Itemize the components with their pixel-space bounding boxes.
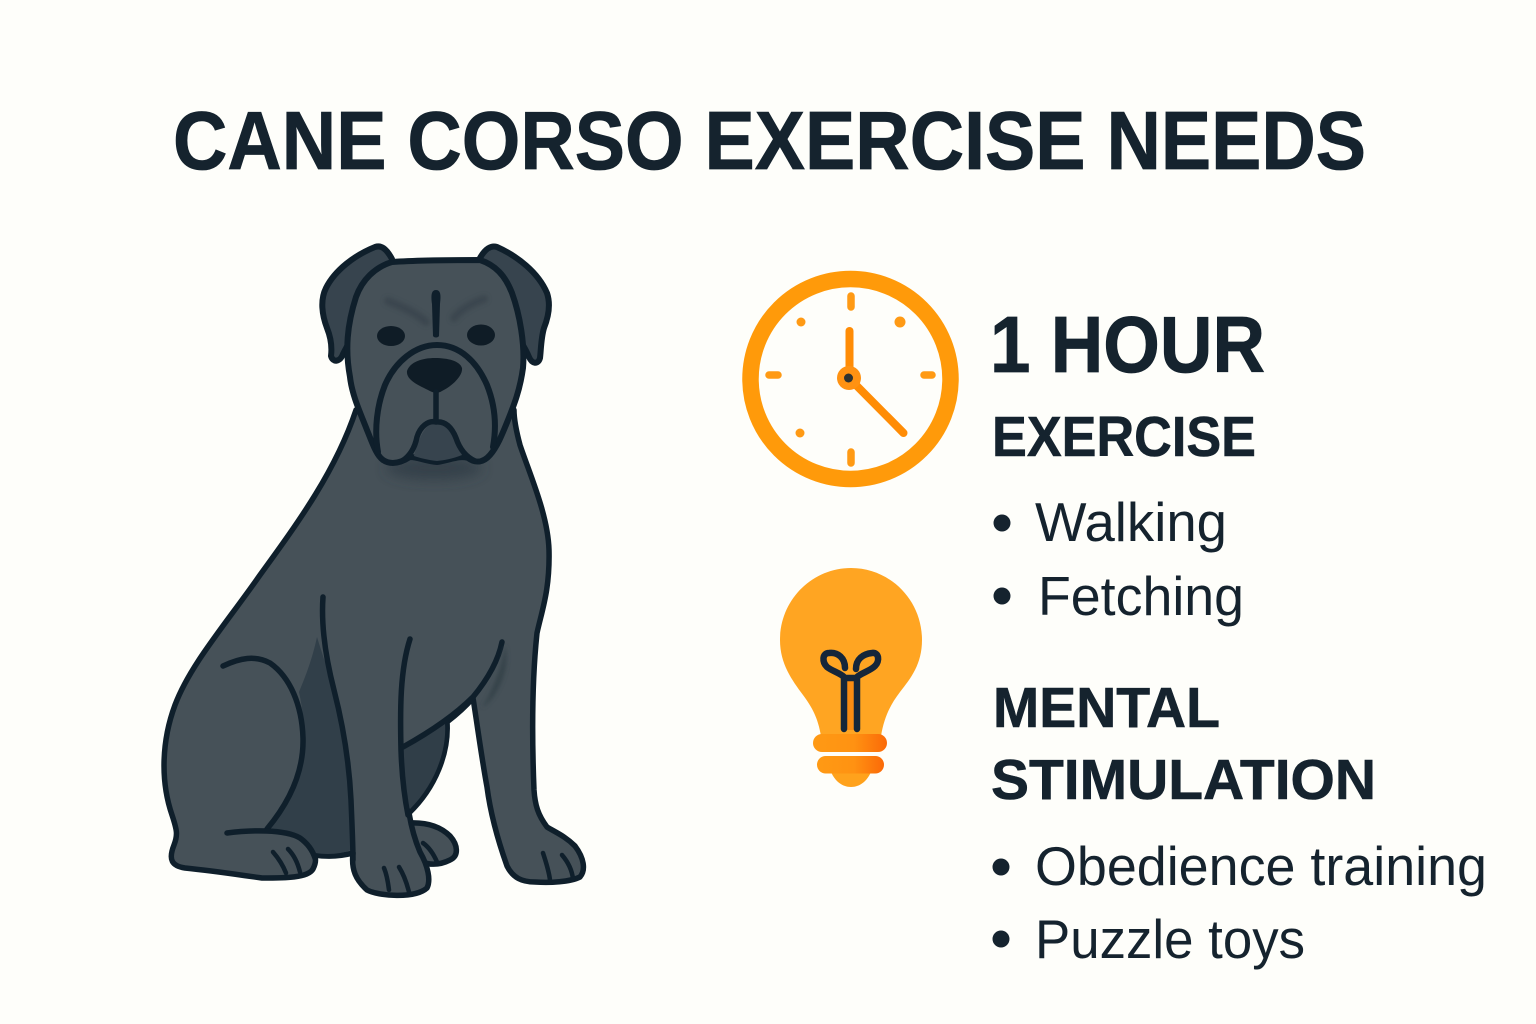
bullet list: mental stimulation xyxy=(992,835,1487,970)
icon: light bulb xyxy=(780,568,922,787)
centre hub xyxy=(837,366,861,390)
hind foot line xyxy=(227,831,315,858)
forehead crease xyxy=(431,290,441,338)
bullet list: exercise: Fetching xyxy=(1038,565,1244,627)
brow shading xyxy=(388,299,484,322)
heading: 1 hour: 1 HOUR xyxy=(990,300,1265,389)
heading: mental stimulation xyxy=(991,676,1376,812)
haunch line xyxy=(223,658,303,829)
dot markers xyxy=(796,316,906,438)
bullet list: exercise: Walking xyxy=(1035,491,1227,553)
right eye xyxy=(467,324,495,346)
chest line xyxy=(403,642,502,747)
base band upper xyxy=(813,734,887,752)
inner mouth xyxy=(414,422,462,461)
clock hands xyxy=(846,331,854,378)
base band lower xyxy=(817,756,884,774)
nose xyxy=(407,358,462,393)
toes xyxy=(273,843,573,892)
title: CANE CORSO EXERCISE NEEDS xyxy=(173,94,1366,187)
clock ring xyxy=(750,279,950,479)
muzzle outline xyxy=(376,345,495,452)
left ear xyxy=(322,246,392,361)
head xyxy=(347,260,523,463)
bullet list: mental stimulation: Puzzle toys xyxy=(1035,908,1305,970)
bullet list: mental stimulation: Obedience training xyxy=(1035,835,1487,897)
front leg right line xyxy=(401,639,410,815)
chin shadow xyxy=(386,456,482,480)
heading: mental stimulation: STIMULATION xyxy=(991,748,1376,812)
icon: clock xyxy=(750,279,950,479)
hour ticks xyxy=(769,296,932,463)
front leg left line xyxy=(322,597,353,860)
right ear xyxy=(478,246,549,363)
philtrum and mouth xyxy=(402,392,475,461)
filament xyxy=(823,653,878,729)
hollow beneath chest xyxy=(403,723,445,809)
heading: exercise: EXERCISE xyxy=(992,405,1256,469)
chest shadow xyxy=(482,645,507,708)
far rear paw xyxy=(408,823,456,864)
centre pin xyxy=(844,374,853,382)
illustration: sitting dog xyxy=(164,246,583,895)
filament core xyxy=(847,680,856,730)
heading: mental stimulation: MENTAL xyxy=(993,676,1220,740)
body xyxy=(164,410,583,895)
inner dark hollow between legs xyxy=(268,637,351,854)
bullet list: exercise xyxy=(994,491,1244,627)
left eye xyxy=(377,326,405,346)
bulb glass xyxy=(780,568,922,736)
bulb base bottom cap xyxy=(831,772,871,787)
